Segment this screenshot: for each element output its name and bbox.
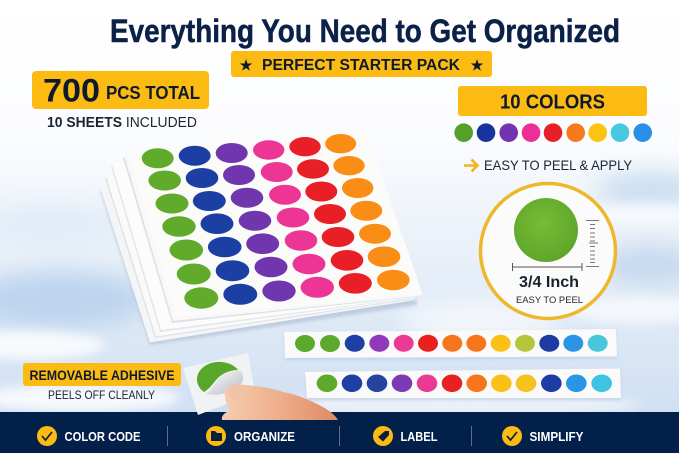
hand holding sticker xyxy=(222,384,338,420)
icon: simplify check xyxy=(502,426,522,446)
badge: perfect starter pack xyxy=(231,51,492,77)
label: simplify: SIMPLIFY xyxy=(530,429,584,444)
icon: color code check xyxy=(37,426,57,446)
text: peels off cleanly: PEELS OFF CLEANLY xyxy=(48,390,155,402)
sticker strip 2 xyxy=(305,368,621,400)
icon: label tag xyxy=(373,426,393,446)
stack of sheets below the top sheet xyxy=(100,128,422,345)
sticker strip 1 xyxy=(284,329,617,360)
title: Everything You Need to Get Organized xyxy=(110,13,620,49)
vertical ruler xyxy=(586,220,599,266)
size callout circle xyxy=(480,184,616,318)
badge: removable adhesive: REMOVABLE ADHESIVE xyxy=(30,368,174,383)
badge: perfect starter pack: ★ xyxy=(240,57,253,73)
icon: organize folder xyxy=(206,426,226,446)
label: organize: ORGANIZE xyxy=(234,429,295,444)
badge: 700 pcs total: 700 xyxy=(43,72,100,108)
badge: 10 colors xyxy=(458,86,647,116)
badge: perfect starter pack: PERFECT STARTER PACK xyxy=(262,57,461,74)
peeling sticker on backing xyxy=(183,353,255,415)
color swatches xyxy=(454,123,652,142)
badge: 700 pcs total: PCS TOTAL xyxy=(106,82,200,103)
text: 10 sheets included: 10 SHEETS INCLUDED xyxy=(47,114,197,131)
arrow: easy to peel xyxy=(464,160,478,172)
text: easy to peel and apply: EASY TO PEEL & APPLY xyxy=(484,157,633,173)
label: color code: COLOR CODE xyxy=(64,429,141,444)
badge: 700 pcs total xyxy=(32,71,209,109)
sticker dots xyxy=(142,134,410,309)
bottom bar features xyxy=(37,426,584,446)
text: size: 3/4 Inch xyxy=(519,274,579,291)
icon: green sticker xyxy=(514,198,578,262)
sticker sheet stack xyxy=(100,127,423,345)
bottom navy bar xyxy=(0,412,679,453)
label: label: LABEL xyxy=(400,429,438,444)
text: easy to peel: EASY TO PEEL xyxy=(516,295,583,306)
badge: 10 colors: 10 COLORS xyxy=(500,91,605,113)
badge: perfect starter pack: ★ xyxy=(471,57,484,73)
horizontal ruler xyxy=(512,263,582,271)
badge: removable adhesive xyxy=(23,363,181,386)
top sheet xyxy=(127,127,423,317)
